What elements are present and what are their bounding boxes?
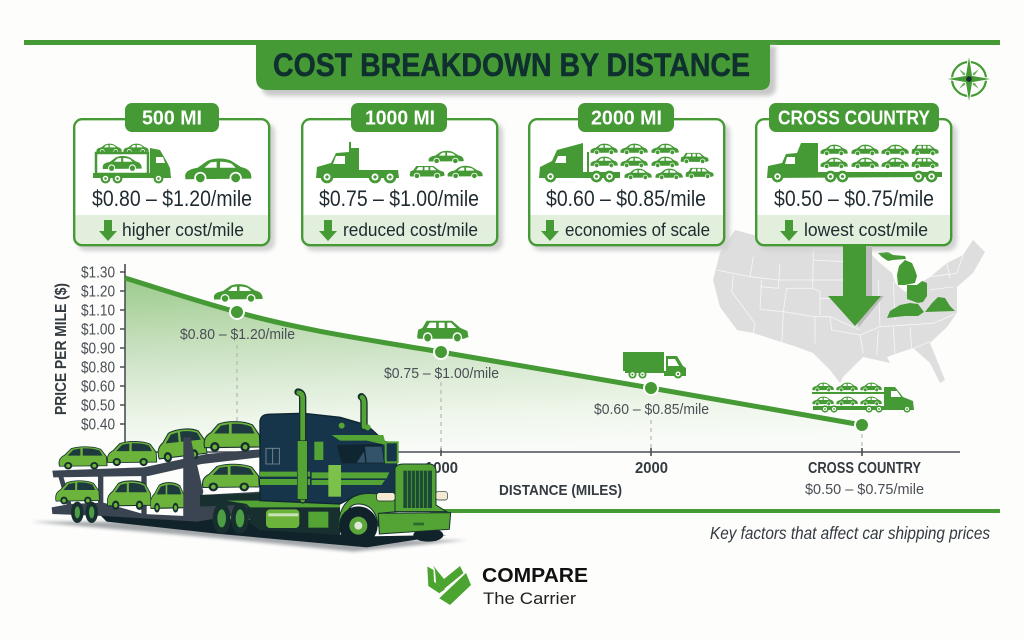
- drop lines: [237, 345, 862, 450]
- line chart: [53, 264, 960, 499]
- y axis labels: $1.30: [81, 264, 115, 282]
- trailer frame: [52, 437, 260, 522]
- heading pill: [578, 103, 674, 132]
- y axis labels: $1.10: [81, 302, 115, 320]
- icon: down arrow: [99, 220, 117, 241]
- bottom rule: [430, 509, 1000, 513]
- data points: [230, 305, 869, 432]
- y axis labels: [81, 264, 115, 434]
- icon: car carrier: [812, 383, 914, 413]
- heading pill: [769, 103, 939, 132]
- icon: flatbed truck with eight cars: [767, 143, 942, 182]
- price curve: [125, 278, 862, 425]
- area under curve: [125, 278, 862, 452]
- front wheels: [339, 506, 378, 545]
- y axis labels: $0.60: [81, 378, 115, 396]
- windshield: [337, 444, 385, 463]
- x axis: [125, 448, 960, 456]
- frame and tank: [200, 493, 340, 535]
- bumper: [378, 513, 451, 534]
- y axis labels: $0.80: [81, 360, 115, 376]
- panel: cross country: [756, 103, 957, 251]
- note: reduced cost/mile: [343, 220, 478, 240]
- point labels: $0.75 – $1.00/mile: [384, 365, 499, 382]
- panel: 500 mi: [74, 103, 275, 251]
- ground shadow: [30, 515, 467, 552]
- brand subtitle: The Carrier: [483, 589, 576, 608]
- icon: down arrow: [319, 220, 337, 241]
- heading pill: [351, 103, 447, 132]
- point labels: $0.60 – $0.85/mile: [594, 401, 709, 418]
- US map: [713, 230, 985, 383]
- icon: down arrow: [541, 220, 559, 241]
- logo mark: [427, 566, 471, 605]
- note: higher cost/mile: [122, 220, 244, 240]
- cars on trailer: [56, 422, 260, 513]
- y axis: [120, 264, 125, 452]
- y axis labels: $0.50: [81, 398, 115, 414]
- icon: tractor and three cars: [316, 142, 483, 183]
- y axis labels: $1.00: [81, 322, 115, 338]
- cross country price: $0.50 – $0.75/mile: [805, 481, 924, 498]
- caption: Key factors that affect car shipping prices: [710, 523, 990, 543]
- title banner: [256, 40, 776, 96]
- y axis title: PRICE PER MILE ($): [53, 283, 70, 415]
- icon: sedan: [214, 284, 263, 303]
- y axis labels: $0.40: [81, 416, 115, 434]
- note: economies of scale: [565, 220, 710, 240]
- icon: box truck: [623, 352, 686, 379]
- trailer uprights front: [183, 437, 202, 517]
- icon: truck and ten cars: [539, 143, 714, 182]
- exhaust stacks: [298, 392, 364, 500]
- x axis labels: 2000: [635, 460, 668, 477]
- x axis labels: 1000: [425, 460, 458, 477]
- grille: [395, 464, 447, 512]
- icon: compass: [945, 54, 993, 104]
- heading pill: 1000 MI: [365, 108, 435, 130]
- point labels: [180, 326, 709, 418]
- sleeper cab: [260, 413, 397, 504]
- x axis labels: [425, 460, 921, 499]
- heading pill: CROSS COUNTRY: [778, 108, 931, 130]
- point labels: $0.80 – $1.20/mile: [180, 326, 295, 343]
- panel: 1000 mi: [302, 103, 503, 251]
- highlighted states: [878, 252, 955, 318]
- panel: 2000 mi: [529, 103, 730, 251]
- illustration: car hauler truck: [30, 392, 467, 552]
- headlights: [377, 493, 395, 501]
- y axis labels: $1.20: [81, 284, 115, 300]
- price: $0.60 – $0.85/mile: [546, 186, 706, 211]
- price: $0.50 – $0.75/mile: [774, 186, 934, 211]
- brand name: COMPARE: [482, 565, 588, 587]
- top rule: [24, 40, 1000, 45]
- y axis labels: $0.90: [81, 340, 115, 358]
- arrow: from cross country to map: [828, 246, 884, 327]
- fender: [338, 493, 397, 528]
- icon: car carrier truck and car: [93, 144, 251, 184]
- x axis labels: DISTANCE (MILES): [499, 482, 622, 499]
- price: $0.75 – $1.00/mile: [319, 186, 479, 211]
- heading pill: [125, 103, 219, 132]
- icon: down arrow: [780, 220, 798, 241]
- heading pill: 2000 MI: [591, 108, 662, 130]
- heading pill: 500 MI: [142, 108, 202, 130]
- price: $0.80 – $1.20/mile: [92, 186, 252, 211]
- logo: [427, 565, 588, 608]
- note: lowest cost/mile: [804, 220, 928, 240]
- cab trim: [260, 435, 398, 497]
- title: COST BREAKDOWN BY DISTANCE: [273, 47, 750, 83]
- trailer wheels: [71, 502, 98, 523]
- x axis labels: CROSS COUNTRY: [808, 460, 921, 477]
- icon: suv: [417, 321, 468, 343]
